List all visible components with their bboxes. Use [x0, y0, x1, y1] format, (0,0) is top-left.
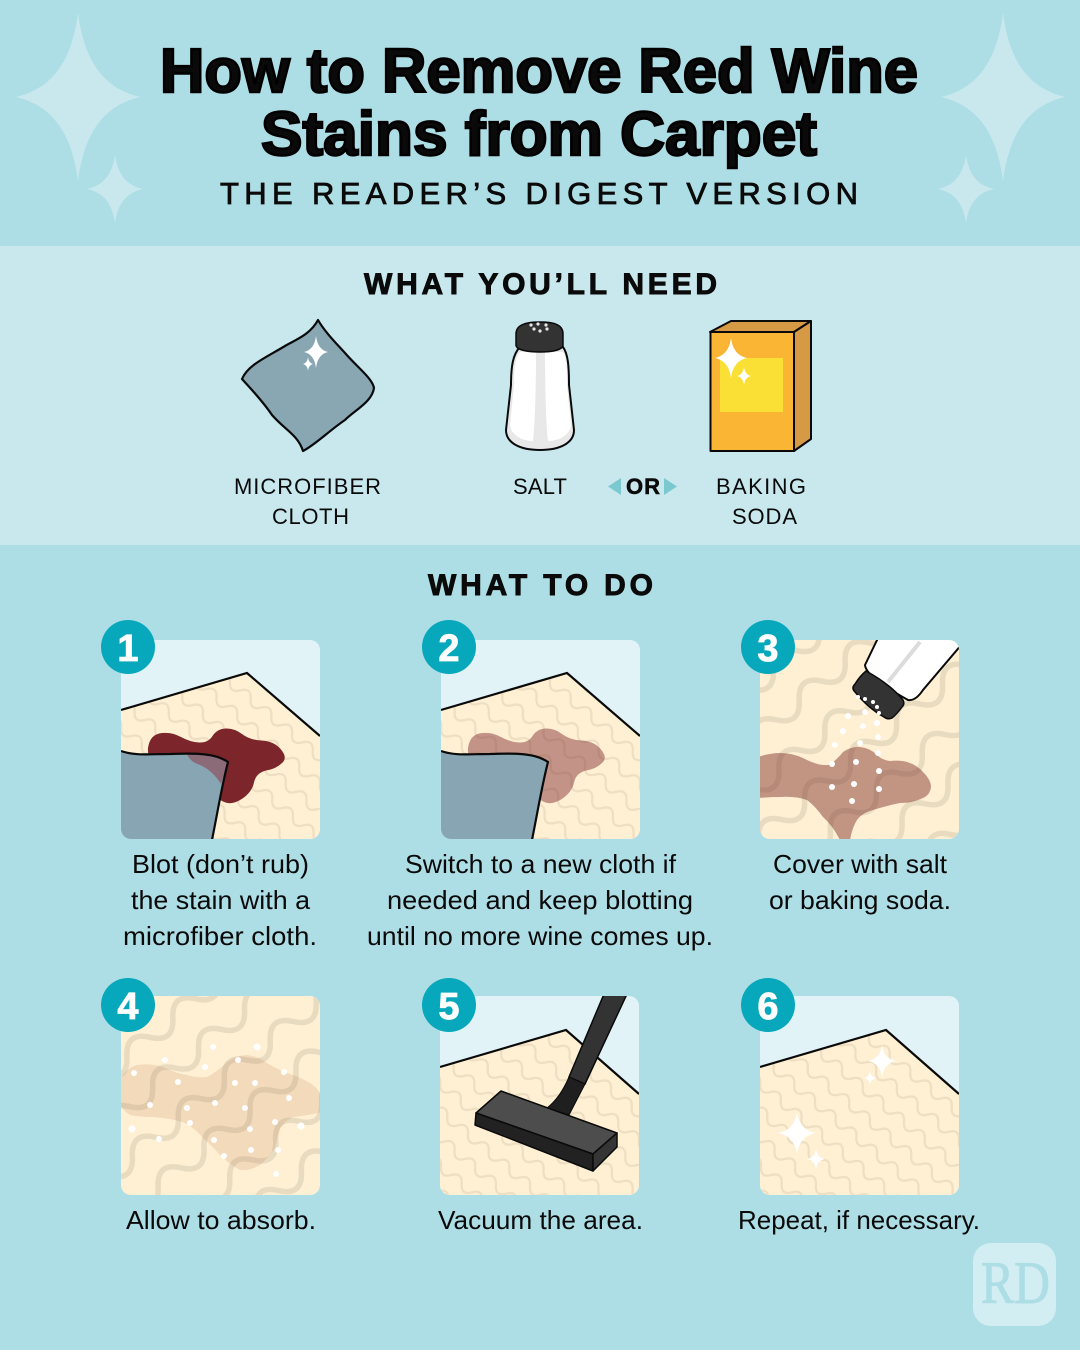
- label: baking soda: [716, 474, 806, 529]
- step 2: [368, 620, 711, 950]
- number badge 4: [101, 978, 155, 1032]
- number badge 3: 3: [757, 628, 779, 670]
- step 6: [740, 978, 978, 1234]
- heading: what to do: WHAT TO DO: [428, 569, 653, 602]
- caption 3: [769, 849, 951, 915]
- number badge 5: [422, 978, 476, 1032]
- illustration: salt absorbing stain: [121, 996, 320, 1195]
- caption 2: Switch to a new cloth if: [405, 849, 677, 879]
- logo: RD: RD: [981, 1250, 1050, 1316]
- title: Stains from Carpet: [261, 100, 817, 169]
- caption 3: Cover with salt: [773, 849, 948, 879]
- logo: RD: [973, 1243, 1056, 1326]
- panel: what you'll need: [0, 246, 1080, 545]
- illustration: faded stain with cloth: [441, 640, 640, 839]
- number badge 2: [422, 620, 476, 674]
- illustration: dark stain with cloth: [121, 640, 320, 839]
- number badge 1: 1: [117, 628, 139, 670]
- number badge 5: 5: [438, 986, 460, 1028]
- caption 6: Repeat, if necessary.: [738, 1205, 980, 1235]
- caption 2: until no more wine comes up.: [367, 921, 713, 951]
- subtitle: THE READER’S DIGEST VERSION: [220, 176, 858, 211]
- label: or: OR: [626, 474, 660, 499]
- icon: salt shaker: [506, 322, 574, 450]
- caption 1: the stain with a: [131, 885, 311, 915]
- number badge 4: 4: [117, 986, 139, 1028]
- step 1: [101, 620, 320, 946]
- icon: microfiber cloth: [242, 320, 374, 451]
- illustration: salt over stain: [760, 640, 959, 839]
- number badge 1: [101, 620, 155, 674]
- label: salt: SALT: [513, 474, 567, 499]
- caption 3: or baking soda.: [769, 885, 951, 915]
- step 4: [101, 978, 320, 1230]
- label: baking soda: SODA: [732, 504, 797, 529]
- caption 2: [367, 849, 713, 951]
- number badge 6: 6: [757, 986, 779, 1028]
- step 5: [422, 978, 641, 1230]
- label: or: [608, 474, 677, 499]
- caption 2: needed and keep blotting: [387, 885, 693, 915]
- number badge 3: [741, 620, 795, 674]
- title: [160, 37, 918, 169]
- header sparkles: [16, 13, 1065, 223]
- illustration: clean carpet: [760, 996, 959, 1195]
- icon: baking soda box: [710, 321, 811, 451]
- label: microfiber cloth: CLOTH: [272, 504, 349, 529]
- step 3: [741, 620, 959, 914]
- label: microfiber cloth: [234, 474, 381, 529]
- caption 1: Blot (don’t rub): [132, 849, 309, 879]
- caption 1: [123, 849, 317, 951]
- number badge 6: [741, 978, 795, 1032]
- caption 1: microfiber cloth.: [123, 921, 317, 951]
- title: How to Remove Red Wine: [160, 37, 918, 106]
- number badge 2: 2: [438, 628, 460, 670]
- caption 4: Allow to absorb.: [126, 1205, 316, 1235]
- caption 5: Vacuum the area.: [438, 1205, 643, 1235]
- illustration: vacuum: [440, 996, 639, 1195]
- label: baking soda: BAKING: [716, 474, 806, 499]
- label: microfiber cloth: MICROFIBER: [234, 474, 381, 499]
- heading: what you'll need: WHAT YOU’LL NEED: [364, 268, 717, 301]
